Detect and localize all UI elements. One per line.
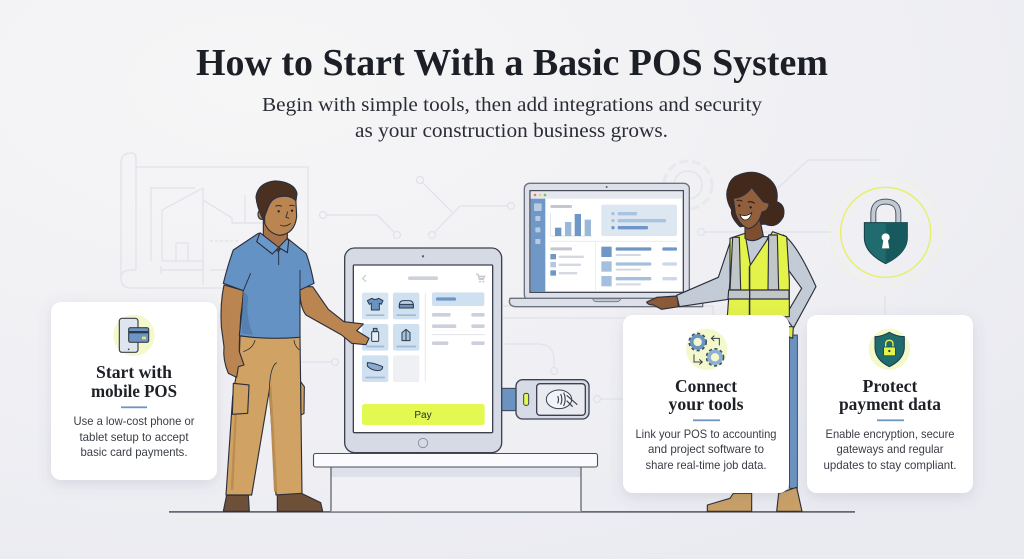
ground line	[169, 511, 855, 513]
card heading	[91, 362, 177, 401]
tablet with POS app: Pay	[414, 410, 432, 421]
subtitle	[262, 94, 762, 142]
card body text: basic card payments.	[80, 445, 188, 459]
woman in safety vest	[647, 172, 816, 511]
icon: shield with padlock	[869, 329, 910, 370]
woman: near arm and hand	[647, 296, 678, 309]
security lock emblem	[831, 177, 941, 287]
tablet with POS app	[345, 248, 502, 453]
card body text: tablet setup to accept	[80, 430, 189, 444]
card heading: payment data	[839, 394, 941, 414]
laptop with dashboard	[509, 183, 703, 307]
icon: phone and payment card	[113, 315, 155, 356]
card body text: Use a low-cost phone or	[74, 414, 194, 428]
card heading: Protect	[862, 376, 918, 396]
table	[314, 454, 598, 512]
card body text: updates to stay compliant.	[824, 458, 956, 472]
card body text: and project software to	[648, 442, 764, 456]
card: start with mobile POS	[51, 302, 217, 480]
card body text	[636, 427, 776, 472]
card body text	[74, 414, 194, 459]
card body text: Enable encryption, secure	[826, 427, 955, 441]
product icons	[367, 298, 413, 371]
subtitle: Begin with simple tools, then add integrations and security	[262, 94, 762, 116]
card heading: Connect	[675, 376, 737, 396]
card body text: share real-time job data.	[646, 458, 766, 472]
circuit lines background	[300, 160, 885, 402]
card heading	[668, 376, 744, 414]
card body text: Link your POS to accounting	[636, 427, 776, 441]
card reader	[501, 380, 589, 419]
woman: torso and vest	[727, 232, 789, 317]
card body text	[824, 427, 956, 472]
woman: trousers and boots	[707, 335, 802, 511]
card: protect payment data	[807, 315, 973, 493]
man: trousers	[226, 336, 302, 495]
card heading	[839, 376, 941, 414]
man: polo shirt	[223, 233, 314, 338]
man: arms	[221, 285, 244, 377]
card body text: gateways and regular	[836, 442, 944, 456]
card heading: mobile POS	[91, 381, 177, 401]
subtitle: as your construction business grows.	[355, 120, 668, 142]
card: connect your tools	[623, 315, 789, 493]
title: How to Start With a Basic POS System	[196, 42, 828, 84]
icon: gears with arrows	[686, 329, 727, 370]
man: neck and head	[256, 181, 297, 250]
card heading: your tools	[668, 394, 744, 414]
woman: head and hair	[727, 172, 784, 241]
man: shoes	[223, 493, 323, 511]
woman: far arm	[783, 235, 816, 328]
man in blue polo	[221, 181, 369, 511]
card heading: Start with	[96, 362, 172, 382]
blueprint sketch background	[121, 153, 308, 288]
